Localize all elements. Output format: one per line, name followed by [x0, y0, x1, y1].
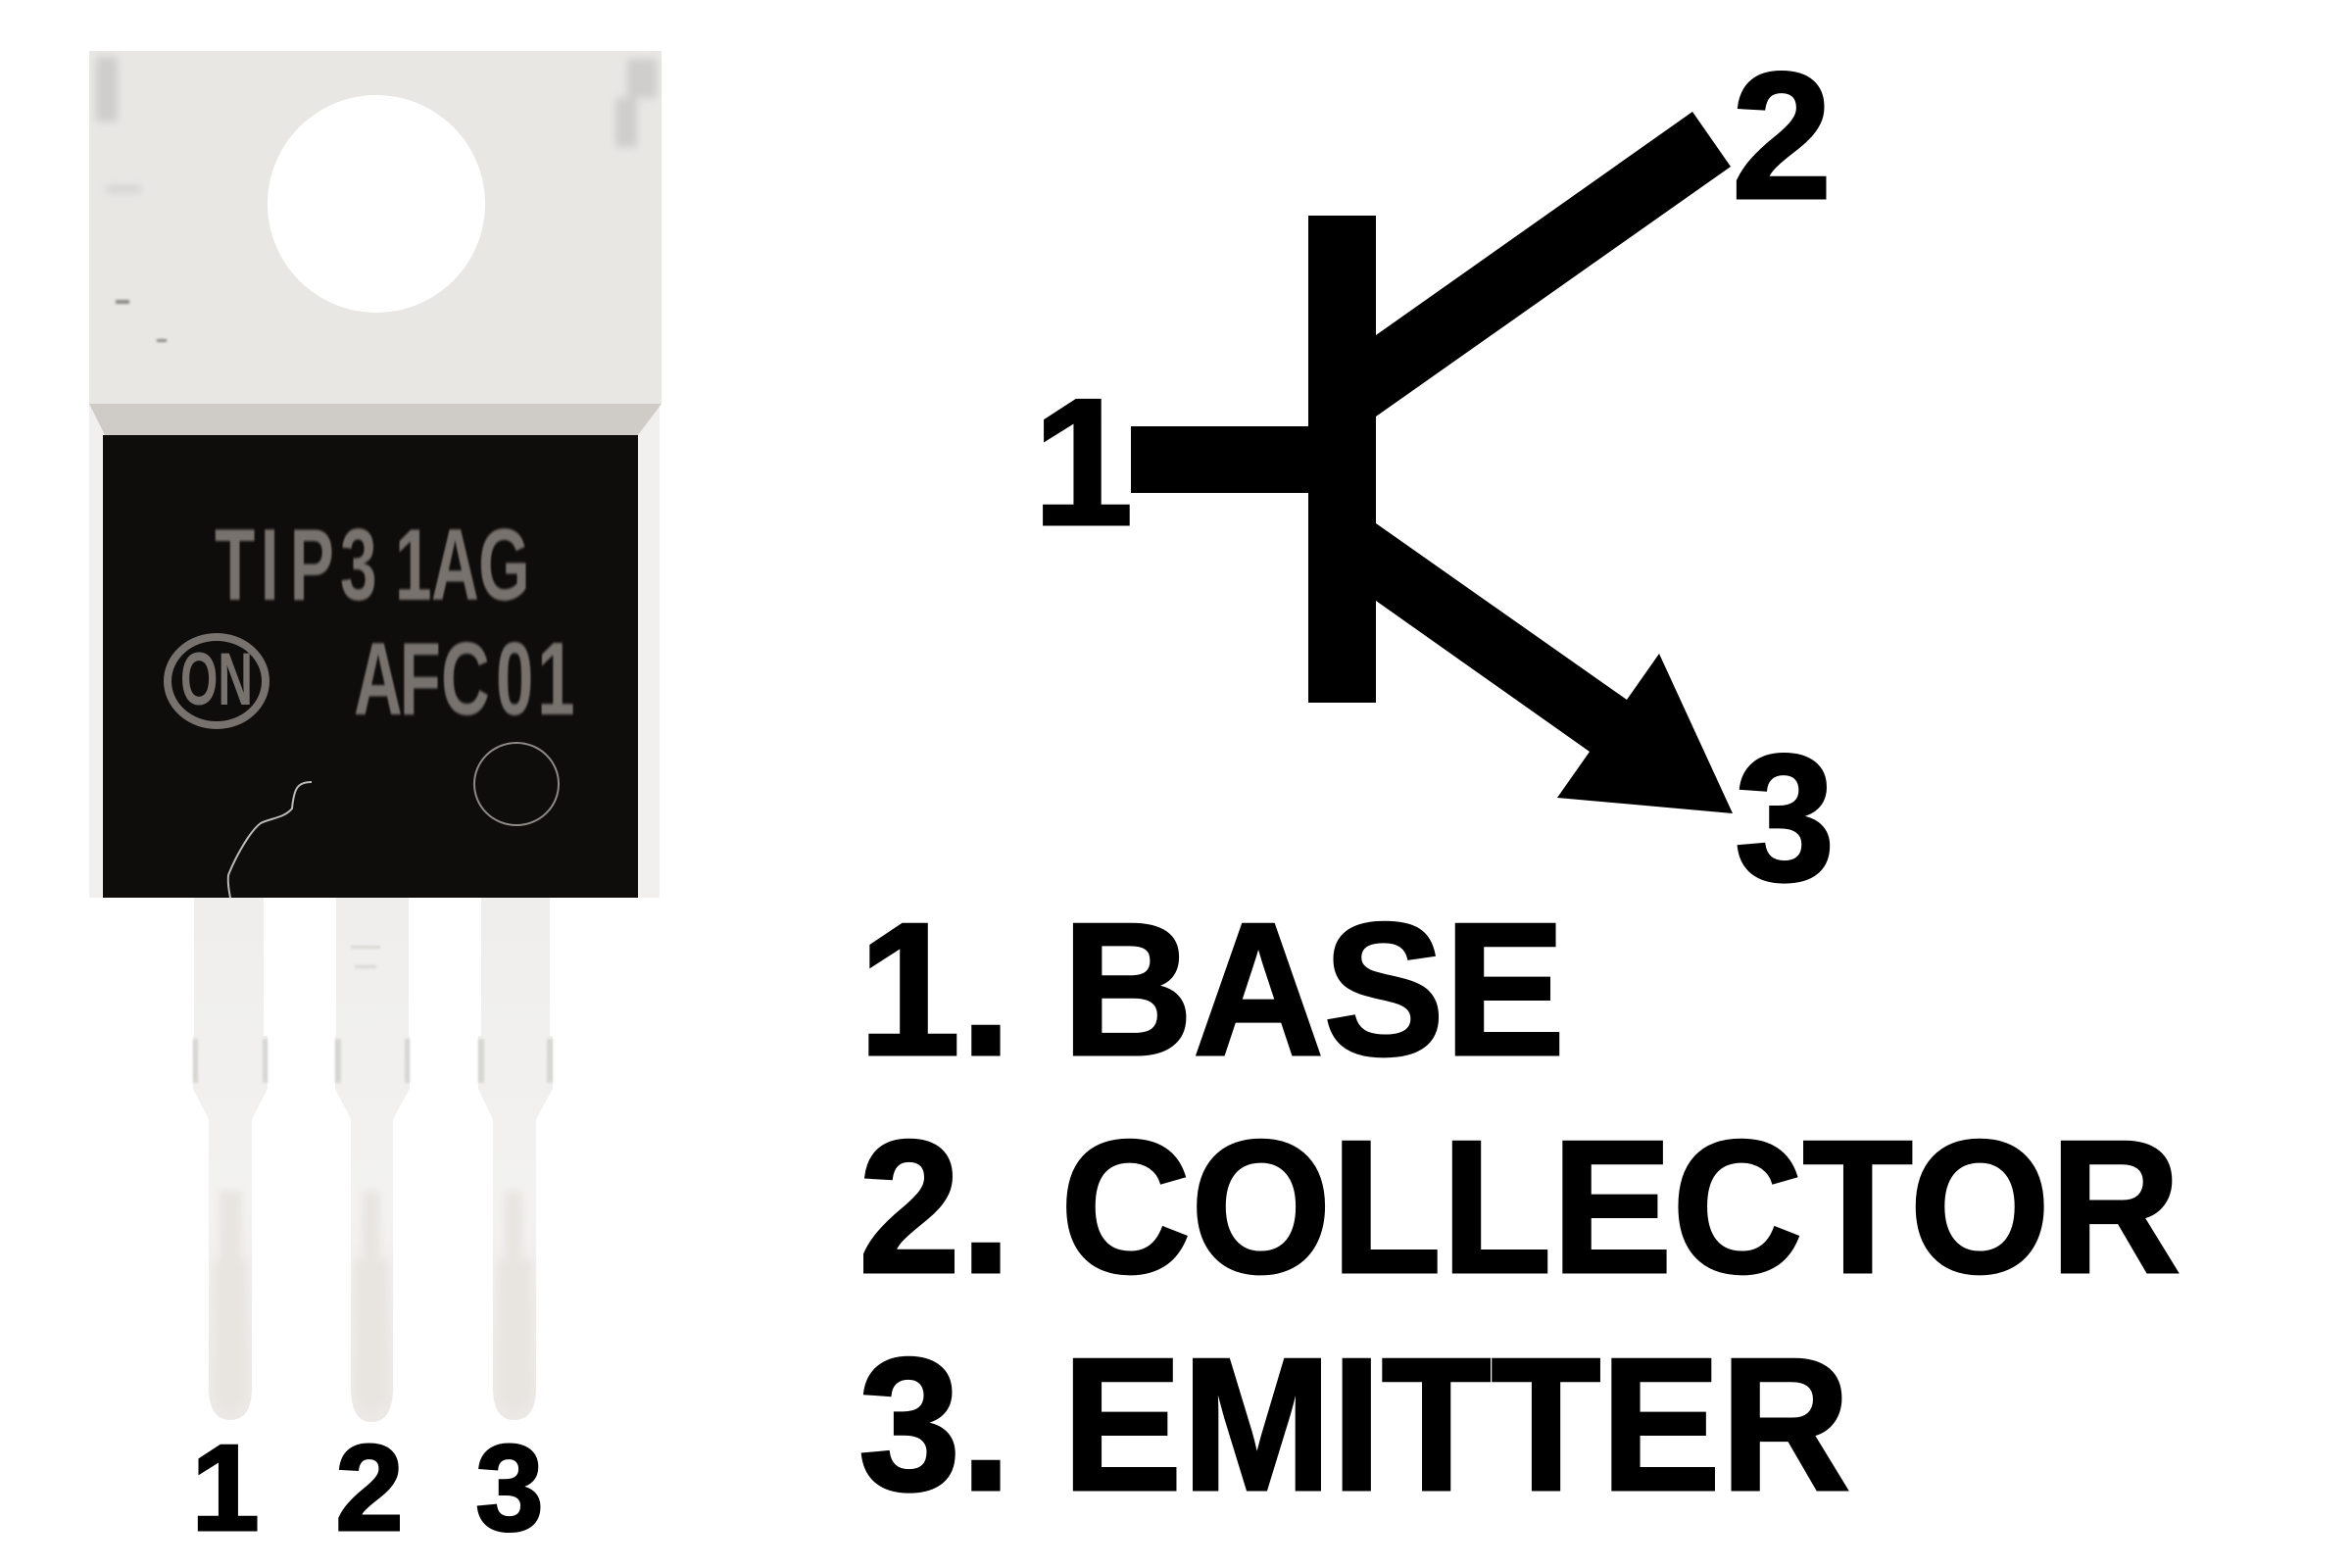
symbol numbers: 1 [1033, 361, 1133, 563]
transistor symbol [1131, 112, 1733, 813]
symbol numbers: 3 [1735, 716, 1835, 918]
legend: collector: 2. [858, 1101, 1011, 1312]
collector lead [1376, 112, 1731, 416]
tab wear marks [96, 57, 657, 192]
legend: emitter: EMITTER [1062, 1318, 1850, 1530]
emitter arrow [1376, 523, 1733, 813]
ON logo: ON [180, 638, 253, 721]
shoulder [89, 404, 662, 435]
marking: TIP31AG: TIP31AG [215, 508, 530, 622]
ON logo [168, 637, 266, 725]
vertical bar [1308, 216, 1376, 703]
base lead [1131, 426, 1317, 493]
legend: base: 1. [858, 883, 1011, 1095]
scratch [228, 782, 312, 898]
pins [193, 898, 553, 1422]
tab specks [116, 300, 167, 342]
pin barb marks [193, 946, 553, 1083]
ejector mark [474, 743, 559, 825]
pin labels [192, 1421, 543, 1556]
marking: AFC01: AFC01 [354, 620, 575, 737]
legend: emitter: 3. [858, 1318, 1011, 1530]
symbol numbers [1033, 34, 1835, 918]
metal tab with mounting hole [89, 51, 662, 404]
pin labels: 3 [476, 1421, 543, 1556]
symbol numbers: 2 [1732, 34, 1832, 236]
transistor photo [89, 51, 662, 1422]
legend: base: BASE [1062, 883, 1565, 1095]
side strips [89, 404, 660, 898]
legend: collector: COLLECTOR [1060, 1101, 2180, 1312]
pin labels: 1 [192, 1421, 259, 1556]
pin legend [858, 883, 2180, 1530]
black body [103, 435, 638, 898]
pin labels: 2 [336, 1421, 403, 1556]
legend: base [858, 883, 1565, 1095]
pin shading [214, 1191, 532, 1411]
